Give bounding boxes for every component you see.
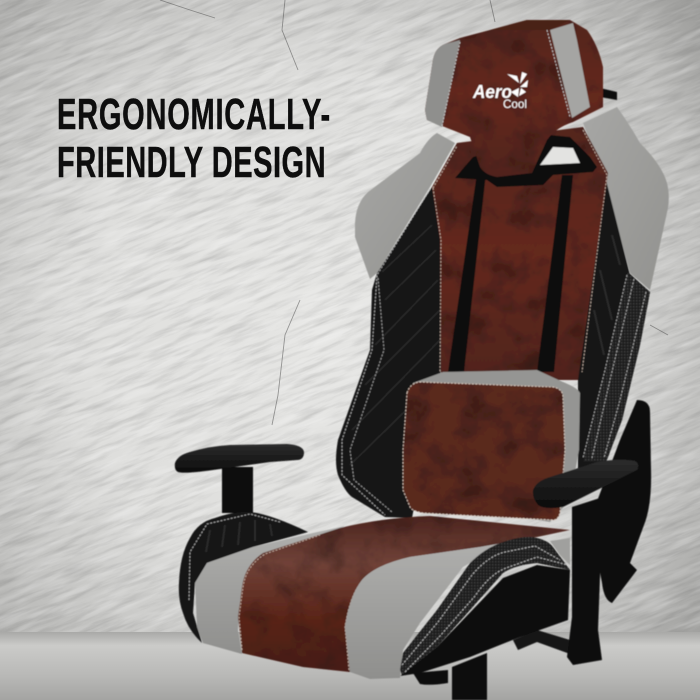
right strap bbox=[537, 175, 573, 372]
headrest left grey panel bbox=[425, 40, 460, 127]
logo wordmark: Cool: Cool bbox=[503, 97, 527, 111]
backrest side: right black and carbon bbox=[578, 180, 650, 470]
background: floor bbox=[0, 632, 700, 700]
right armrest post bbox=[567, 497, 603, 665]
title bbox=[57, 89, 330, 186]
left seat bolster bbox=[179, 512, 308, 643]
headrest top roll bbox=[490, 20, 570, 30]
base post bbox=[452, 653, 487, 700]
backrest wing: right bbox=[583, 107, 669, 290]
base bar bbox=[513, 630, 570, 654]
backrest wing: left bbox=[355, 133, 455, 279]
AeroCool logo bbox=[472, 72, 528, 111]
strap behind headrest bbox=[600, 88, 617, 100]
seat: left grey panel bbox=[195, 526, 345, 654]
seat: right grey panel bbox=[345, 537, 537, 679]
headrest bbox=[425, 20, 603, 177]
right armrest pad bbox=[533, 460, 638, 508]
left armrest post bbox=[222, 467, 253, 513]
seat right bolster bbox=[400, 537, 570, 675]
headrest cutout frame bbox=[455, 135, 597, 187]
seat underside bbox=[400, 565, 570, 676]
lumbar pillow bbox=[403, 370, 580, 522]
seat: brown centre panel bbox=[238, 516, 570, 672]
headrest right grey panel bbox=[550, 23, 590, 118]
headrest cutout bbox=[540, 147, 580, 165]
backrest side: left black bbox=[336, 187, 441, 518]
title: ERGONOMICALLY- bbox=[57, 89, 330, 138]
right side bracket bbox=[590, 400, 651, 603]
left strap bbox=[448, 173, 486, 372]
headrest stitching bbox=[442, 30, 570, 126]
chair bbox=[175, 20, 669, 700]
seat: grey panel behind bolster bbox=[550, 538, 570, 565]
logo icon: fan bbox=[507, 72, 528, 97]
backrest centre panel bbox=[432, 127, 608, 380]
title: FRIENDLY DESIGN bbox=[57, 137, 326, 186]
caster foot bbox=[413, 670, 448, 685]
left armrest pad bbox=[175, 444, 304, 473]
logo wordmark: Aero: Aero bbox=[472, 82, 512, 102]
